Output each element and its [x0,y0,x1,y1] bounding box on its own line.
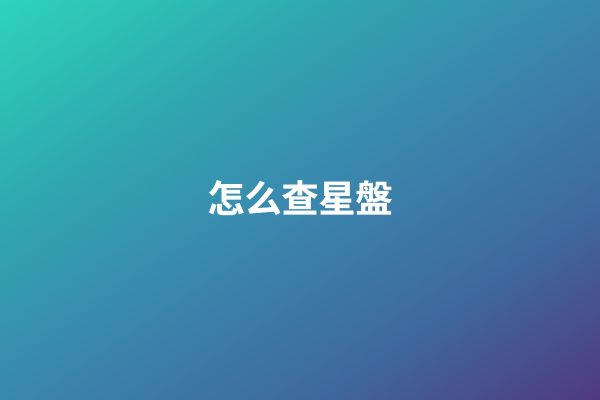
title: 怎么查星盤 [208,179,392,220]
